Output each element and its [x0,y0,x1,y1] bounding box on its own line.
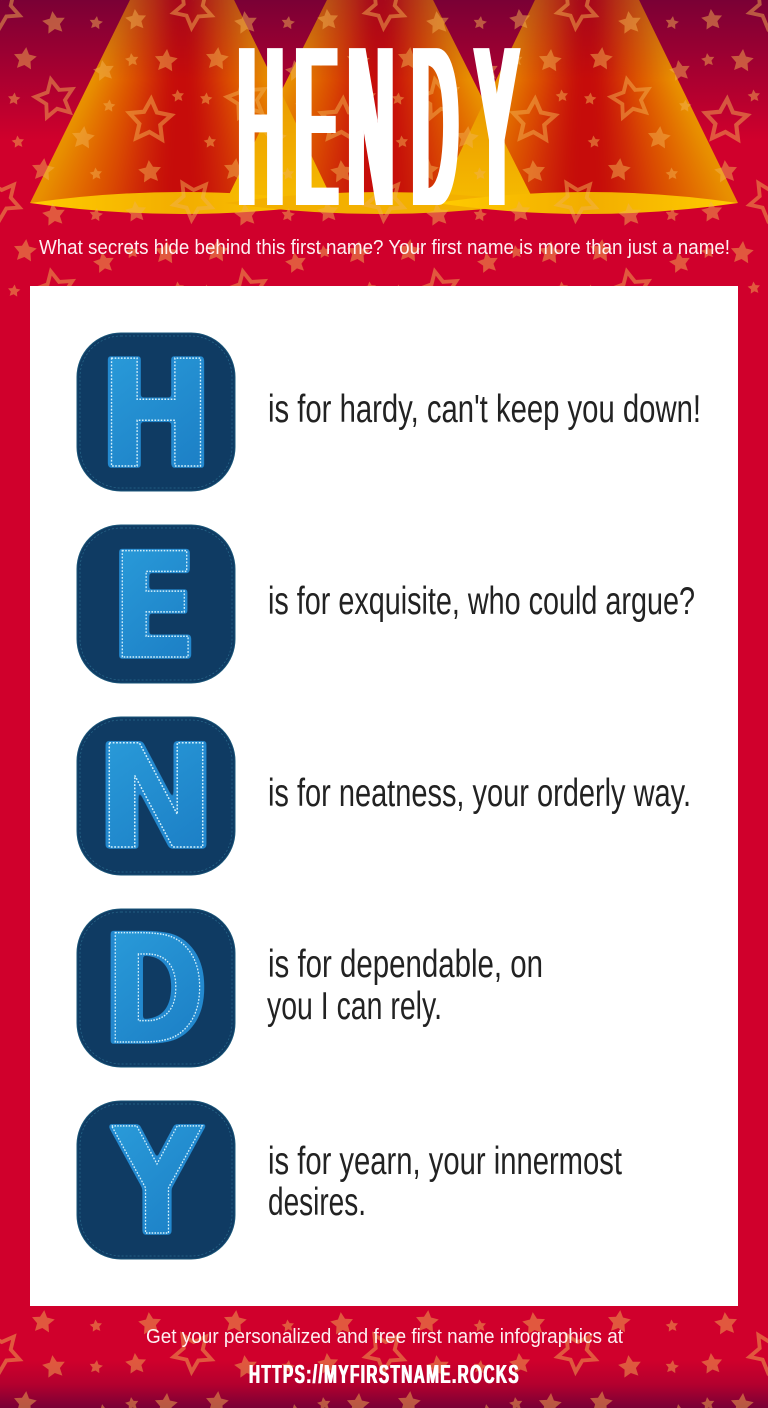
text: D lines: you I can rely. [267,985,442,1028]
icon: letter E: E [111,523,197,692]
star pattern: top [0,0,768,300]
text: Y lines [268,1140,622,1224]
letter row E [77,523,695,692]
letter row D [77,904,543,1078]
icon: letter D: D [104,904,206,1078]
panel: name letters [30,286,738,1306]
letter row N [77,714,691,881]
icon: letter D [77,904,235,1078]
icon: letter N: N [96,714,216,881]
text: Y lines: is for yearn, your innermost [268,1140,622,1183]
text: D lines [267,943,543,1028]
title: HENDY [239,0,517,254]
footer url: HTTPS://MYFIRSTNAME.ROCKS [249,1359,520,1389]
letter row Y [77,1097,622,1268]
icon: letter H: H [99,329,213,501]
icon: letter Y: Y [111,1097,203,1268]
icon: letter Y [77,1097,235,1268]
star pattern: bottom [0,1306,768,1408]
text: D lines: is for dependable, on [268,943,543,986]
spotlight cones [0,0,768,214]
subtitle: What secrets hide behind this first name? Your first name is more than just a name! [39,237,730,259]
letter row H [77,329,701,501]
icon: letter E [77,523,235,692]
text: Y lines: desires. [268,1181,366,1224]
footer text: Get your personalized and free first name infographics at [146,1326,623,1348]
